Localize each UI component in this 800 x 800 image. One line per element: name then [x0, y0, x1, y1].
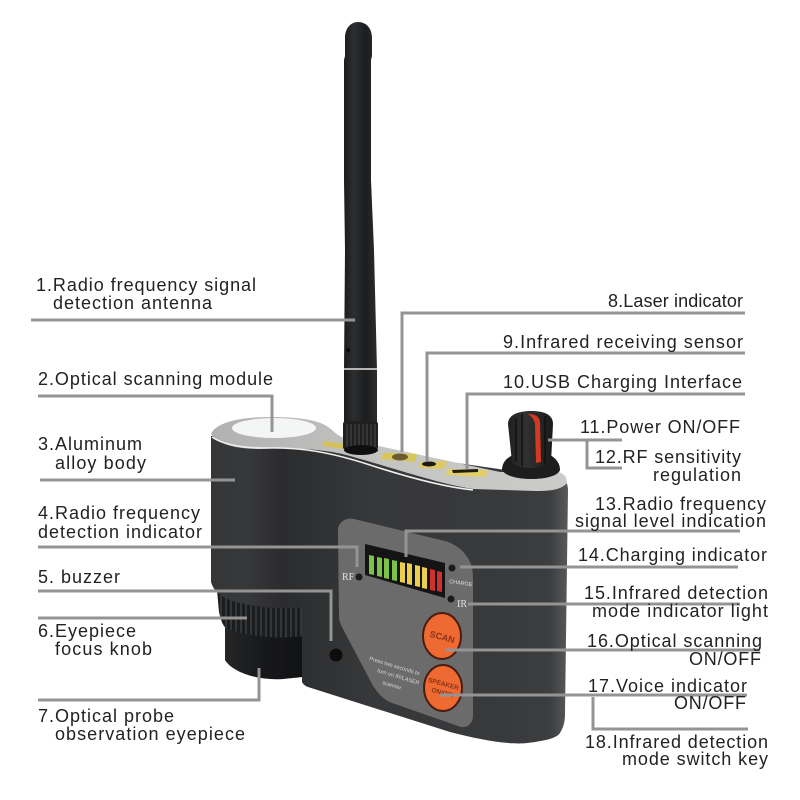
panel instruction text: Press two seconds to	[368, 656, 420, 677]
label 12: regulation	[653, 465, 741, 485]
panel instruction text: turn on IR/LASER	[376, 668, 420, 687]
label 6	[38, 621, 152, 659]
label 1: 1.Radio frequency signal	[36, 275, 256, 295]
label 3: 3.Aluminum	[38, 434, 142, 454]
buzzer hole	[330, 648, 342, 662]
indicator: charge	[448, 564, 473, 588]
label 11: 11.Power ON/OFF	[580, 417, 740, 437]
SCAN button: SCAN	[429, 629, 456, 645]
label 7	[38, 706, 245, 744]
SPEAKER button: SPEAKER	[427, 677, 460, 692]
label 2: 2.Optical scanning module	[38, 369, 273, 389]
label 3	[38, 434, 146, 473]
indicator: charge: CHARGE	[449, 579, 473, 588]
label 6: 6.Eyepiece	[38, 621, 136, 641]
silver top plate	[211, 417, 567, 491]
label 15: mode indicator light	[592, 601, 768, 621]
label 16	[587, 631, 762, 669]
label 18: 18.Infrared detection	[585, 732, 768, 752]
label 14: 14.Charging indicator	[578, 545, 767, 565]
label 17: ON/OFF	[674, 693, 746, 713]
label 8: 8.Laser indicator	[608, 291, 743, 311]
control knob	[502, 411, 560, 479]
SCAN button	[423, 613, 461, 659]
label 5: 5. buzzer	[38, 567, 120, 587]
level meter	[365, 544, 445, 598]
leader lines	[31, 313, 760, 729]
label 16: ON/OFF	[689, 649, 761, 669]
indicator: IR: IR	[457, 599, 467, 610]
SPEAKER button	[424, 665, 462, 711]
indicator: RF: RF	[342, 572, 355, 583]
label 6: focus knob	[55, 639, 152, 659]
SPEAKER button: ON/OFF	[431, 687, 456, 700]
eyepiece focus knob and lens barrel	[217, 590, 303, 679]
label 4: detection indicator	[38, 522, 202, 542]
label 3: alloy body	[55, 453, 146, 473]
optical scanning lens	[232, 418, 316, 438]
label 1: detection antenna	[53, 293, 213, 313]
label 12: 12.RF sensitivity	[595, 447, 741, 467]
label 13	[575, 494, 766, 531]
label 15: 15.Infrared detection	[584, 583, 768, 603]
label 17	[588, 676, 747, 713]
white highlight edge	[212, 437, 473, 490]
label 16: 16.Optical scanning	[587, 631, 762, 651]
label 7: 7.Optical probe	[38, 706, 174, 726]
panel instruction text	[368, 656, 420, 692]
panel instruction text: scanner.	[381, 680, 404, 692]
label 12	[595, 447, 741, 485]
label 7: observation eyepiece	[55, 724, 245, 744]
label 18: mode switch key	[622, 749, 768, 769]
device: signal detector	[211, 22, 568, 743]
device body	[211, 436, 568, 743]
label 17: 17.Voice indicator	[588, 676, 747, 696]
label 10: 10.USB Charging Interface	[503, 372, 742, 392]
label 4	[38, 503, 202, 542]
yellow port markings	[322, 441, 488, 477]
control panel	[338, 519, 473, 727]
label 4: 4.Radio frequency	[38, 503, 200, 523]
label 1	[36, 275, 256, 313]
label 9: 9.Infrared receiving sensor	[503, 332, 743, 352]
label 13: 13.Radio frequency	[595, 494, 766, 514]
antenna	[343, 22, 378, 455]
label 13: signal level indication	[575, 511, 766, 531]
indicator: IR	[448, 596, 467, 610]
indicator: RF	[342, 572, 362, 583]
label 15	[584, 583, 768, 621]
label 18	[585, 732, 768, 769]
